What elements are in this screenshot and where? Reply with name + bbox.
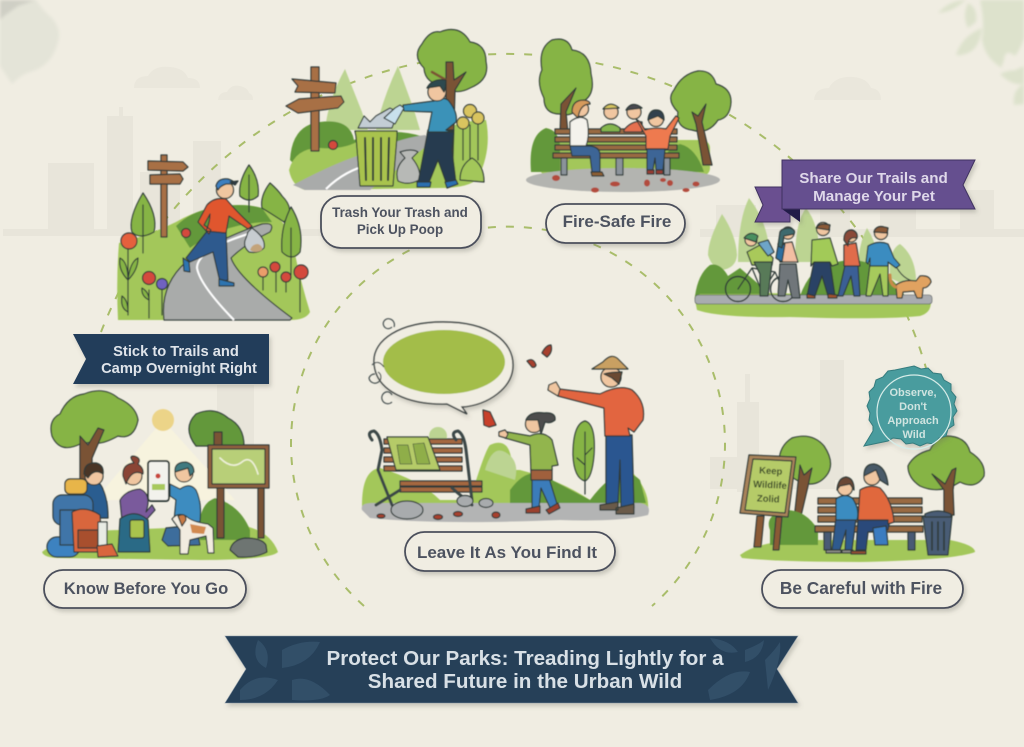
green ellipse [383, 330, 505, 394]
label: trash your trash and pick up poop: Pick Up Poop [357, 222, 443, 237]
label: know before you go: Know Before You Go [64, 579, 228, 598]
right tree [908, 436, 984, 515]
bushes [695, 260, 905, 296]
left tree [769, 436, 831, 545]
left tree [539, 39, 592, 134]
person with backpack [776, 227, 800, 298]
gravel ground [526, 168, 720, 192]
backpacks and gear [47, 479, 150, 557]
title banner [225, 636, 798, 703]
background: corner foliage top-right [938, 0, 1024, 105]
sign: Wildlife [753, 479, 787, 492]
ground [42, 525, 278, 560]
ground [117, 205, 310, 320]
badge: observe, don't approach wild [864, 366, 957, 449]
label: leave it as you find it: Leave It As You Find It [417, 543, 597, 562]
ribbon text: Stick to Trails and [113, 344, 239, 360]
panel: trash your trash illustration [286, 30, 488, 190]
child [826, 477, 858, 553]
inner ring [877, 375, 951, 449]
seated woman [570, 100, 604, 176]
runner with bag [183, 179, 264, 286]
panel: share our trails illustration [695, 198, 932, 318]
background: corner foliage top-left [0, 0, 59, 84]
yellow flowers [457, 104, 484, 182]
badge text: Wild [902, 429, 926, 441]
label: be careful with fire: Be Careful with Fire [780, 578, 943, 598]
right tree [671, 71, 731, 165]
badge text: Observe, [889, 387, 937, 399]
person with bottle [403, 80, 458, 188]
fallen leaves [552, 175, 700, 192]
ribbon text: Camp Overnight Right [101, 361, 257, 377]
signpost [286, 67, 344, 151]
ground [740, 540, 975, 562]
road [163, 224, 292, 320]
swirls [369, 319, 394, 404]
banner title text: Protect Our Parks: Treading Lightly for a [326, 647, 724, 670]
adult in orange jacket [851, 464, 894, 554]
label: know before you go [44, 570, 246, 608]
girl in green [499, 413, 560, 514]
path [293, 135, 428, 190]
man in orange [548, 356, 644, 514]
tree [417, 30, 487, 160]
sign: Zolid [757, 493, 780, 506]
sign [740, 455, 796, 550]
ribbon back tail [755, 187, 790, 222]
grass and bushes [540, 140, 710, 176]
left tree [51, 391, 138, 482]
man right with tablet [148, 461, 200, 546]
path [695, 295, 932, 304]
falling leaves [377, 345, 552, 520]
small tree [573, 421, 594, 494]
trash can [923, 511, 952, 555]
banner leaf decoration right [708, 638, 780, 700]
dog [890, 275, 931, 298]
man left [76, 463, 108, 518]
gravel path [362, 503, 649, 522]
badge text: Don't [899, 401, 927, 413]
sun [152, 409, 174, 431]
bench [553, 129, 679, 175]
hiker in green jacket [807, 222, 838, 298]
bushes [199, 498, 250, 540]
badge text: Approach [887, 415, 939, 427]
cyclist and bike [726, 233, 796, 302]
panel: stick to trails illustration [117, 155, 310, 320]
panel: leave it as you find it illustration [362, 319, 649, 522]
label: fire-safe fire [546, 204, 685, 243]
rock [230, 538, 267, 557]
panel: fire-safe fire illustration [526, 39, 731, 192]
dog [172, 515, 214, 554]
ribbon front [782, 160, 975, 209]
grass ground [695, 292, 931, 318]
panel: be careful with fire illustration [740, 436, 984, 562]
outer dashed arc [101, 54, 926, 368]
pale background trees [325, 66, 420, 130]
banner shape [225, 636, 798, 703]
garbage bag [397, 150, 420, 183]
hiker in red [838, 230, 860, 296]
label: fire-safe fire: Fire-Safe Fire [563, 212, 671, 231]
label: trash your trash and pick up poop [321, 196, 481, 248]
hiker with dog leash [866, 226, 920, 296]
ribbon: share our trails [755, 160, 975, 222]
sign: Keep [759, 465, 783, 478]
panel: know before you go illustration [42, 391, 278, 560]
label: be careful with fire [762, 570, 963, 608]
trees [131, 165, 301, 275]
ribbon fold [782, 209, 800, 222]
three children [601, 104, 679, 174]
bushes [362, 427, 648, 510]
ribbon shape [73, 334, 269, 384]
scalloped badge [864, 366, 957, 446]
bubble outline [374, 322, 513, 414]
inner dashed arc [291, 227, 725, 606]
map board [208, 445, 269, 538]
woman centre [120, 456, 155, 520]
bench [815, 498, 923, 550]
right tree [189, 411, 244, 470]
label: trash your trash and pick up poop: Trash Your Trash and [332, 205, 468, 220]
ribbon text: Manage Your Pet [813, 188, 935, 205]
background: faint city skyline [3, 107, 1024, 492]
flowers [120, 228, 308, 318]
banner leaf decoration left [240, 640, 330, 700]
label: leave it as you find it [405, 532, 615, 571]
ribbon: stick to trails [73, 334, 269, 384]
speech bubble [369, 319, 513, 414]
signpost [148, 155, 188, 237]
sun rays [95, 420, 235, 500]
ribbon text: Share Our Trails and [799, 170, 948, 187]
pale trees [708, 198, 916, 290]
bench with plaque [369, 431, 493, 519]
trash can with bottles [355, 105, 404, 186]
background: faint clouds [134, 67, 881, 100]
banner title text: Shared Future in the Urban Wild [368, 670, 682, 693]
shrubs and ground [290, 121, 450, 170]
